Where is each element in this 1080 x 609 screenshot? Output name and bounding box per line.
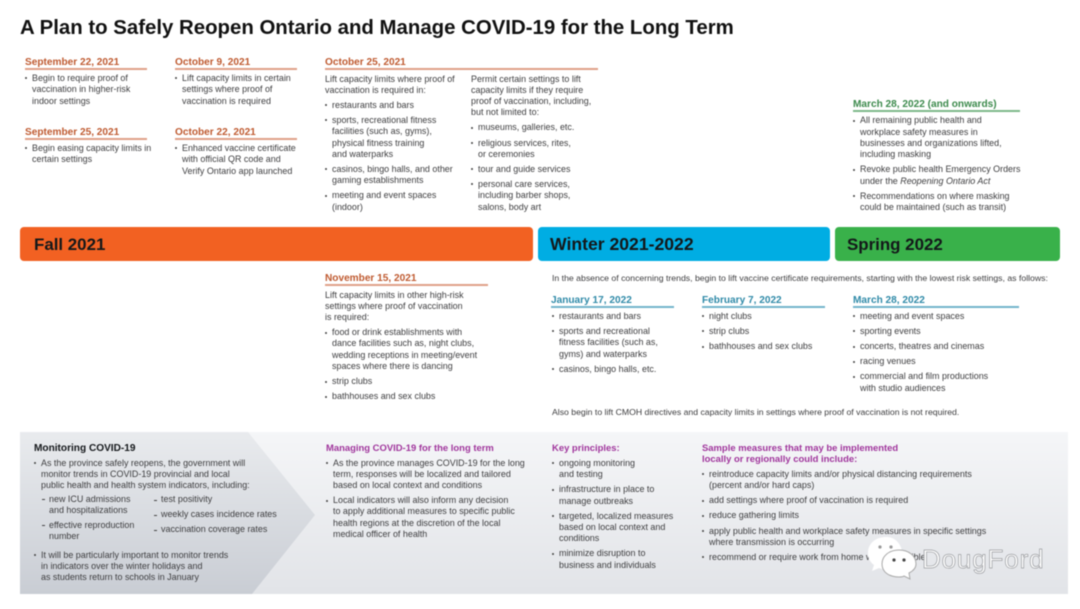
season bar: Winter 2021-2022: Winter 2021-2022 [550, 234, 694, 254]
date heading: October 9 [175, 55, 297, 70]
text: monitoring intro: public health and health system indicators, including: [41, 480, 250, 490]
text: October 25 permitted settings: proof of vaccination, including, [471, 96, 591, 106]
date heading: March 28 [853, 292, 1019, 308]
text: October 25 vaccination required: gaming establishments [332, 175, 423, 185]
list: indicators column 2: test positivity [161, 494, 212, 504]
season bar: Winter 2021-2022 [538, 227, 830, 261]
text: March 28: with studio audiences [860, 383, 945, 393]
text: November 15: food or drink establishments with [332, 327, 462, 337]
text: November 15: wedding receptions in meeting/event [332, 350, 477, 360]
text: October 25 permitted settings: or ceremonies [478, 149, 535, 159]
text: March 28: racing venues [860, 356, 916, 366]
text: sample measures: (percent and/or hard caps) [709, 480, 814, 490]
text: September 22: Begin to require proof of [32, 73, 128, 83]
text: October 25 permitted settings: museums, galleries, etc. [478, 122, 574, 132]
text: October 9 [174, 73, 291, 106]
heading: Key principles: Key principles: [552, 442, 620, 454]
list: indicators column 1: and hospitalizations [49, 505, 128, 515]
date heading: February 7 [702, 292, 825, 308]
text: sample measures: reintroduce capacity limits and/or physical distancing requirements [709, 469, 972, 479]
text: March 28: sporting events [860, 326, 921, 336]
text: sample measures: apply public health and workplace safety measures in specific settings [709, 526, 986, 536]
text: March 28 and onwards: Revoke public health Emergency Orders [860, 164, 1020, 174]
heading: Managing COVID-19: Managing COVID-19 for the long term [326, 442, 494, 454]
text: key principles: minimize disruption to [559, 548, 645, 558]
text: February 7 [701, 311, 813, 351]
text: October 25 vaccination required: and waterparks [332, 149, 393, 159]
text: October 25 vaccination required: restaurants and bars [332, 100, 414, 110]
text: sample measures: add settings where proof of vaccination is required [709, 495, 908, 505]
text: September 22: vaccination in higher-risk [32, 84, 130, 94]
text: monitoring winter note: as students return to schools in January [41, 572, 199, 582]
text: October 25 vaccination required [324, 74, 456, 212]
text: CMOH note: Also begin to lift CMOH directives and capacity limits in settings where proof of vaccination is not required. [552, 407, 959, 417]
text: January 17 [551, 311, 658, 375]
heading: Sample measures: Sample measures that may be implemented [702, 442, 898, 454]
text: key principles: business and individuals [559, 560, 656, 570]
text: February 7: night clubs [709, 311, 752, 321]
text: November 15: spaces where there is dancing [332, 361, 453, 371]
season bar: Spring 2022 [835, 227, 1060, 261]
text: March 28 and onwards: under the Reopening Ontario Act [860, 176, 990, 186]
text: September 22: indoor settings [32, 96, 90, 106]
date heading: October 22 [175, 125, 297, 140]
text: monitoring intro: monitor trends in COVID-19 provincial and local [41, 469, 230, 479]
date heading: March 28 and onwards: March 28, 2022 (and onwards) [853, 98, 997, 110]
text: key principles: conditions [559, 533, 599, 543]
text: October 25 vaccination required: Lift capacity limits where proof of [325, 74, 455, 84]
text: monitoring winter note: It will be particularly important to monitor trends [41, 550, 228, 560]
text: managing [325, 458, 525, 539]
text: monitoring intro: As the province safely reopens, the government will [41, 458, 245, 468]
icon: chat bubbles watermark [868, 537, 917, 580]
text: March 28 [852, 311, 988, 393]
text: March 28: commercial and film productions [860, 371, 988, 381]
text: October 25 permitted settings: tour and guide services [478, 164, 570, 174]
panel: long-term background [20, 432, 1068, 594]
text: managing: Local indicators will also inform any decision [333, 495, 508, 505]
text: managing: based on local context and conditions [333, 480, 482, 490]
arrow: monitoring panel [20, 432, 314, 594]
text: managing: to apply additional measures to specific public [333, 506, 515, 516]
text: March 28 and onwards: businesses and organizations lifted, [860, 138, 1002, 148]
text: October 25 permitted settings: salons, body art [478, 202, 541, 212]
text: monitoring winter note [34, 550, 228, 582]
text: October 25 permitted settings [470, 74, 592, 213]
text: October 25 permitted settings: capacity limits if they require [471, 85, 583, 95]
text: September 25 [24, 143, 152, 165]
text: February 7: strip clubs [709, 326, 749, 336]
text: October 25 permitted settings: including barber shops, [478, 190, 570, 200]
date heading: September 25: September 25, 2021 [25, 127, 119, 138]
text: January 17: sports and recreational [559, 326, 650, 336]
text: October 25 vaccination required: vaccination is required in: [325, 85, 426, 95]
watermark: DougFord: DougFord [922, 544, 1044, 574]
text: October 9: vaccination is required [182, 96, 271, 106]
date heading: February 7: February 7, 2022 [702, 294, 782, 306]
text: March 28 and onwards: including masking [860, 149, 931, 159]
list: indicators column 1 [42, 494, 134, 541]
text: November 15: settings where proof of vaccination [325, 301, 463, 311]
text: January 17: fitness facilities (such as, [559, 337, 658, 347]
text: October 25 vaccination required: casinos, bingo halls, and other [332, 164, 453, 174]
text: October 9: Lift capacity limits in certain [182, 73, 291, 83]
text: sample measures: recommend or require work from home where possible [709, 552, 926, 562]
text: winter intro: In the absence of concerning trends, begin to lift vaccine certificate requirements, starting with the lowest risk settings, as follows: [552, 273, 1048, 283]
text: key principles: targeted, localized measures [559, 511, 673, 521]
text: October 22 [174, 143, 296, 177]
list: indicators column 1: effective reproduction [49, 520, 134, 530]
date heading: November 15 [325, 271, 488, 286]
date heading: October 25 [325, 55, 598, 70]
text: October 25 permitted settings: religious services, rites, [478, 138, 571, 148]
text: October 25 permitted settings: personal care services, [478, 179, 570, 189]
text: October 25 vaccination required: (indoor) [332, 202, 363, 212]
text: key principles [551, 458, 674, 570]
season bar: Spring 2022: Spring 2022 [847, 235, 943, 254]
list: indicators column 2: vaccination coverage rates [161, 524, 267, 534]
text: September 25: Begin easing capacity limits in [32, 143, 151, 153]
text: January 17: casinos, bingo halls, etc. [559, 364, 656, 374]
text: March 28 and onwards [852, 115, 1021, 212]
list: indicators column 1: number [49, 531, 79, 541]
heading: Sample measures: locally or regionally could include: [702, 454, 857, 465]
text: January 17: gyms) and waterparks [559, 349, 647, 359]
text: October 9: settings where proof of [182, 84, 272, 94]
date heading: November 15: November 15, 2021 [325, 273, 416, 284]
text: October 25 vaccination required: facilities (such as, gyms), [332, 126, 432, 136]
text: managing: As the province manages COVID-19 for the long [333, 458, 525, 468]
text: key principles: ongoing monitoring [559, 458, 635, 468]
text: March 28: meeting and event spaces [860, 311, 964, 321]
date heading: September 25 [25, 125, 147, 140]
text: sample measures: reduce gathering limits [709, 510, 799, 520]
date heading: March 28: March 28, 2022 [853, 294, 925, 306]
text: key principles: based on local context and [559, 522, 665, 532]
text: key principles: and testing [559, 469, 603, 479]
text: October 22: Verify Ontario app launched [182, 166, 292, 176]
text: September 22 [24, 73, 131, 107]
season bar: Fall 2021: Fall 2021 [34, 235, 105, 254]
date heading: September 22 [25, 55, 147, 70]
text: monitoring winter note: in indicators over the winter holidays and [41, 561, 202, 571]
text: March 28: concerts, theatres and cinemas [860, 341, 984, 351]
date heading: March 28 and onwards [853, 96, 1020, 112]
text: key principles: infrastructure in place to [559, 484, 654, 494]
text: November 15: is required: [325, 312, 369, 322]
season bar: Fall 2021 [20, 227, 533, 261]
text: March 28 and onwards: All remaining public health and [860, 115, 982, 125]
date heading: October 9: October 9, 2021 [175, 57, 250, 68]
date heading: October 22: October 22, 2021 [175, 127, 256, 138]
text: September 25: certain settings [32, 154, 92, 164]
text: managing: medical officer of health [333, 529, 427, 539]
text: November 15: dance facilities such as, night clubs, [332, 338, 474, 348]
text: managing: health regions at the discretion of the local [333, 518, 500, 528]
list: indicators column 2: weekly cases incidence rates [161, 509, 277, 519]
date heading: January 17: January 17, 2022 [551, 294, 632, 306]
text: October 25 permitted settings: but not limited to: [471, 107, 539, 117]
text: November 15: Lift capacity limits in other high-risk [325, 290, 464, 300]
text: March 28 and onwards: workplace safety measures in [860, 127, 978, 137]
text: November 15: bathhouses and sex clubs [332, 391, 435, 401]
text: October 25 vaccination required: meeting and event spaces [332, 190, 436, 200]
text: sample measures [701, 469, 986, 562]
text: October 25 permitted settings: Permit certain settings to lift [471, 74, 581, 84]
text: February 7: bathhouses and sex clubs [709, 341, 812, 351]
heading: Monitoring COVID-19: Monitoring COVID-19 [34, 442, 136, 454]
date heading: January 17 [551, 292, 674, 308]
text: monitoring intro [33, 458, 250, 491]
text: October 25 vaccination required: sports, recreational fitness [332, 115, 436, 125]
text: sample measures: where transmission is occurring [709, 537, 834, 547]
text: March 28 and onwards: Recommendations on where masking [860, 191, 1010, 201]
list: indicators column 1: new ICU admissions [49, 494, 130, 504]
text: managing: term, responses will be localized and tailored [333, 469, 511, 479]
text: October 25 vaccination required: physical fitness training [332, 138, 424, 148]
text: March 28 and onwards: could be maintained (such as transit) [860, 202, 1006, 212]
date heading: September 22: September 22, 2021 [25, 57, 119, 68]
text: October 22: with official QR code and [182, 154, 281, 164]
text: January 17: restaurants and bars [559, 311, 641, 321]
heading: Sample measures [702, 442, 898, 465]
text: November 15 [324, 290, 478, 401]
list: indicators column 2 [154, 494, 277, 535]
text: October 22: Enhanced vaccine certificate [182, 143, 296, 153]
date heading: October 25: October 25, 2021 [325, 57, 406, 68]
text: November 15: strip clubs [332, 376, 372, 386]
text: key principles: manage outbreaks [559, 496, 633, 506]
title: A Plan to Safely Reopen Ontario and Manage COVID-19 for the Long Term [20, 17, 734, 39]
